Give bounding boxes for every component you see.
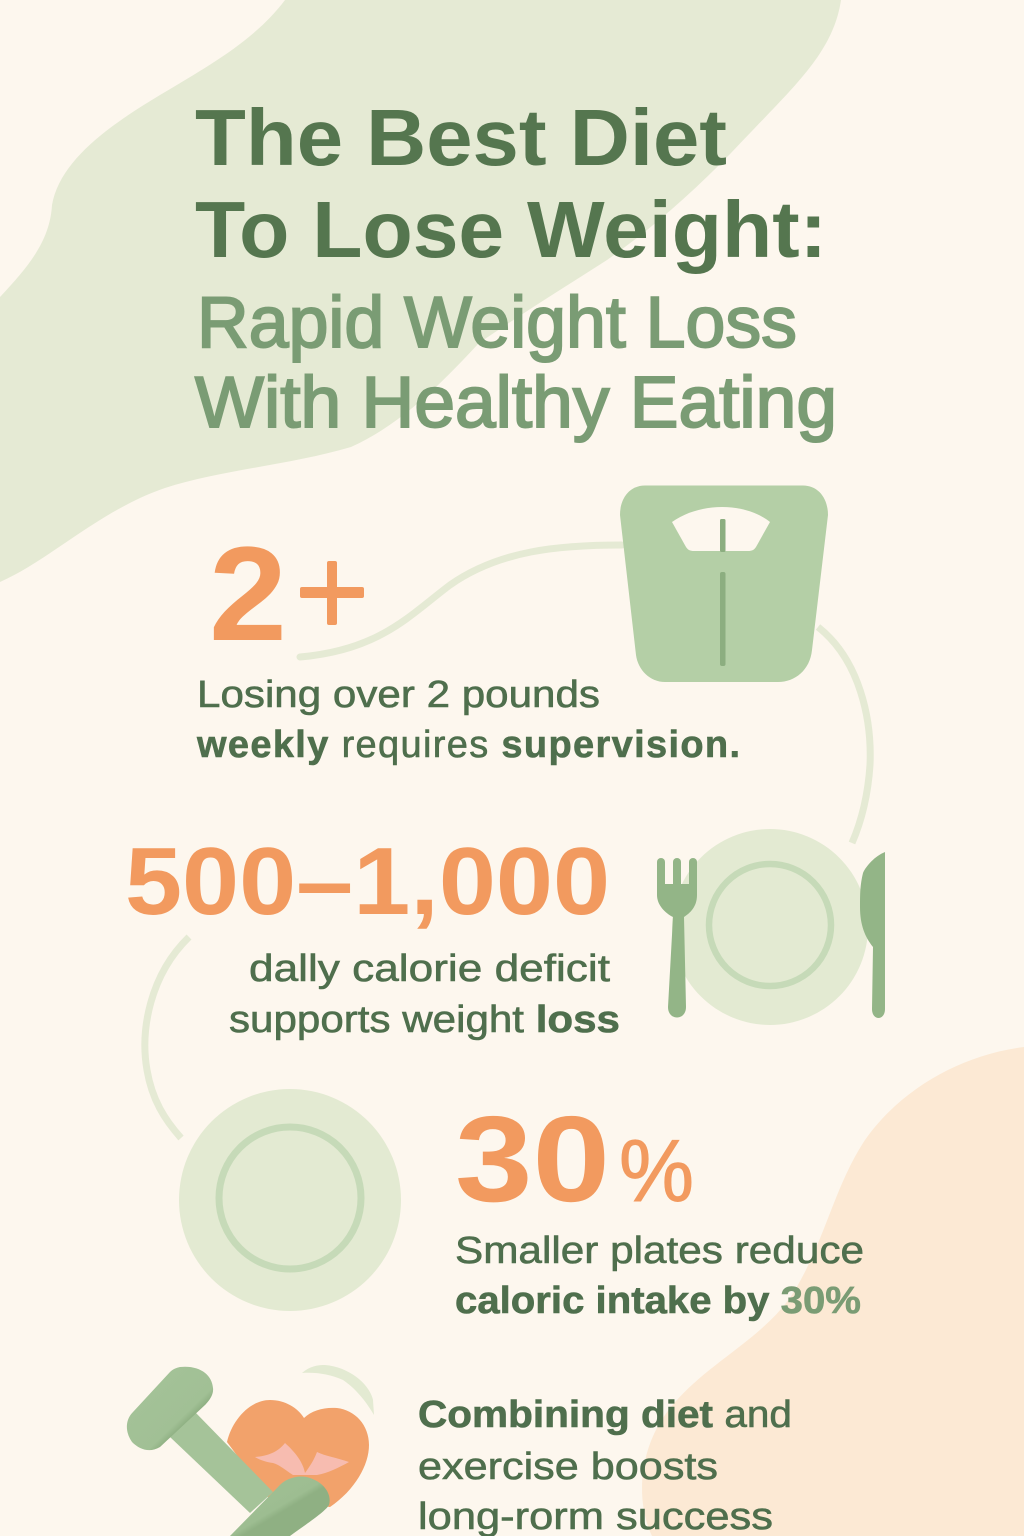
icon: small plate <box>179 1089 401 1311</box>
text: calorie deficit <box>229 948 620 1041</box>
stat: 30%: % <box>619 1121 694 1220</box>
text: supervision: Losing over 2 pounds <box>197 674 600 716</box>
subtitle <box>195 283 837 443</box>
stat: 30%: 30 <box>455 1091 610 1227</box>
stat: 30% <box>455 1091 694 1227</box>
text: diet and exercise: exercise boosts <box>418 1446 718 1488</box>
dumbbell bottom weight <box>230 1476 330 1536</box>
dumbbell handle <box>170 1412 273 1513</box>
title line 1: The Best Diet <box>195 93 727 182</box>
text: diet and exercise <box>418 1394 792 1536</box>
connector path: scale to 2+ <box>300 545 622 657</box>
background blob: green <box>0 0 841 582</box>
text: calorie deficit: dally calorie deficit <box>249 948 611 990</box>
stat: 2+: 2 <box>209 520 287 669</box>
motion arc <box>302 1365 374 1415</box>
text: supervision: weekly requires supervision. <box>196 724 740 766</box>
icon: dumbbell and heart <box>127 1365 374 1536</box>
heart highlight <box>255 1443 349 1475</box>
title line 2: To Lose Weight: <box>195 185 827 274</box>
fork <box>657 858 697 1018</box>
plate <box>672 829 868 1025</box>
icon: plate with fork and knife <box>657 829 885 1025</box>
text: calorie deficit: supports weight loss <box>229 999 620 1041</box>
text: diet and exercise: Combining diet and <box>418 1394 792 1436</box>
stat: 2+ <box>209 520 364 669</box>
text: supervision <box>196 674 740 766</box>
connector path: scale to plate <box>818 627 870 843</box>
dumbbell top weight <box>127 1367 213 1450</box>
text: smaller plates <box>455 1230 864 1322</box>
icon: weighing scale <box>620 486 828 682</box>
background blob: peach <box>642 1047 1024 1536</box>
title <box>195 93 827 274</box>
text: smaller plates: Smaller plates reduce <box>455 1230 864 1272</box>
text: smaller plates: caloric intake by 30% <box>455 1280 861 1322</box>
subtitle line 1: Rapid Weight Loss <box>197 283 797 363</box>
connector path: deficit to small plate <box>145 937 189 1138</box>
subtitle line 2: With Healthy Eating <box>195 363 837 443</box>
heart <box>227 1400 369 1507</box>
stat: 500-1,000: 500–1,000 <box>125 828 610 935</box>
knife <box>860 852 885 1018</box>
